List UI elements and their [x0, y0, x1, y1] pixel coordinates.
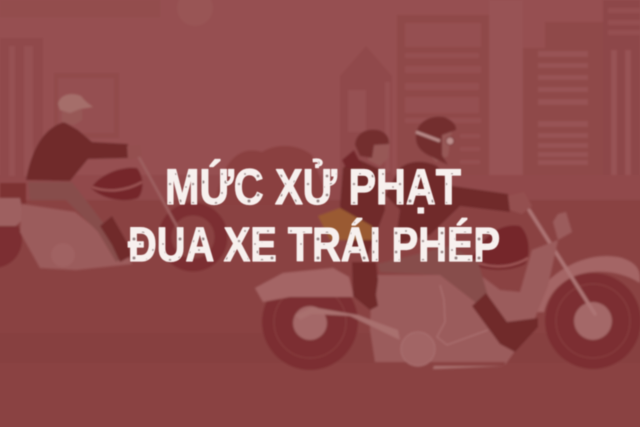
building: top left band [0, 0, 160, 17]
building: left window block [54, 73, 119, 138]
goggles [416, 132, 440, 141]
fork [529, 210, 595, 314]
headlight [553, 212, 572, 240]
passenger helmet [355, 130, 389, 158]
rider face [425, 130, 452, 162]
footboard [433, 366, 505, 369]
head [62, 106, 82, 125]
passenger face [368, 138, 390, 166]
house windows [348, 82, 390, 172]
passenger boot [352, 262, 378, 310]
building: striped tall tower [397, 15, 489, 175]
jacket [26, 122, 128, 181]
rear fender [255, 268, 354, 302]
circle sun [177, 0, 213, 26]
passenger jacket [340, 158, 385, 255]
front wheel [165, 209, 221, 265]
rider jacket [385, 162, 510, 245]
hand [127, 145, 142, 160]
rear wheel [262, 274, 358, 370]
engine frame [370, 240, 558, 365]
rear wheel [0, 212, 22, 268]
engine body [20, 204, 132, 270]
rider boot [472, 293, 538, 352]
building: left columns [0, 38, 43, 178]
building: pale gap tower [489, 0, 523, 175]
fuel tank [91, 168, 142, 200]
title [128, 158, 500, 272]
boot [100, 216, 131, 262]
handlebar fork [135, 150, 180, 232]
engine details [437, 285, 488, 345]
front wheel [545, 273, 640, 369]
passenger hair [342, 150, 362, 168]
buildings [0, 0, 640, 205]
title line 2: ĐUA XE TRÁI PHÉP [128, 218, 500, 272]
exhaust [295, 307, 400, 340]
building: striped right tower [523, 22, 640, 175]
title line 1: MỨC XỬ PHẠT [165, 158, 461, 215]
motorcycle left [0, 94, 221, 270]
rider helmet [416, 117, 456, 165]
fuel tank [470, 225, 529, 270]
rider hand [508, 192, 532, 214]
helmet [58, 94, 93, 113]
rider legs [28, 182, 128, 262]
building: right columns [603, 0, 640, 175]
rear seat fender [0, 183, 26, 204]
motorcycle right [255, 117, 640, 370]
road [0, 200, 640, 427]
rider legs [378, 246, 488, 306]
front fender [530, 256, 640, 312]
bushes behind title [215, 146, 330, 205]
passenger scarf [318, 208, 372, 240]
building: small house [340, 46, 392, 175]
